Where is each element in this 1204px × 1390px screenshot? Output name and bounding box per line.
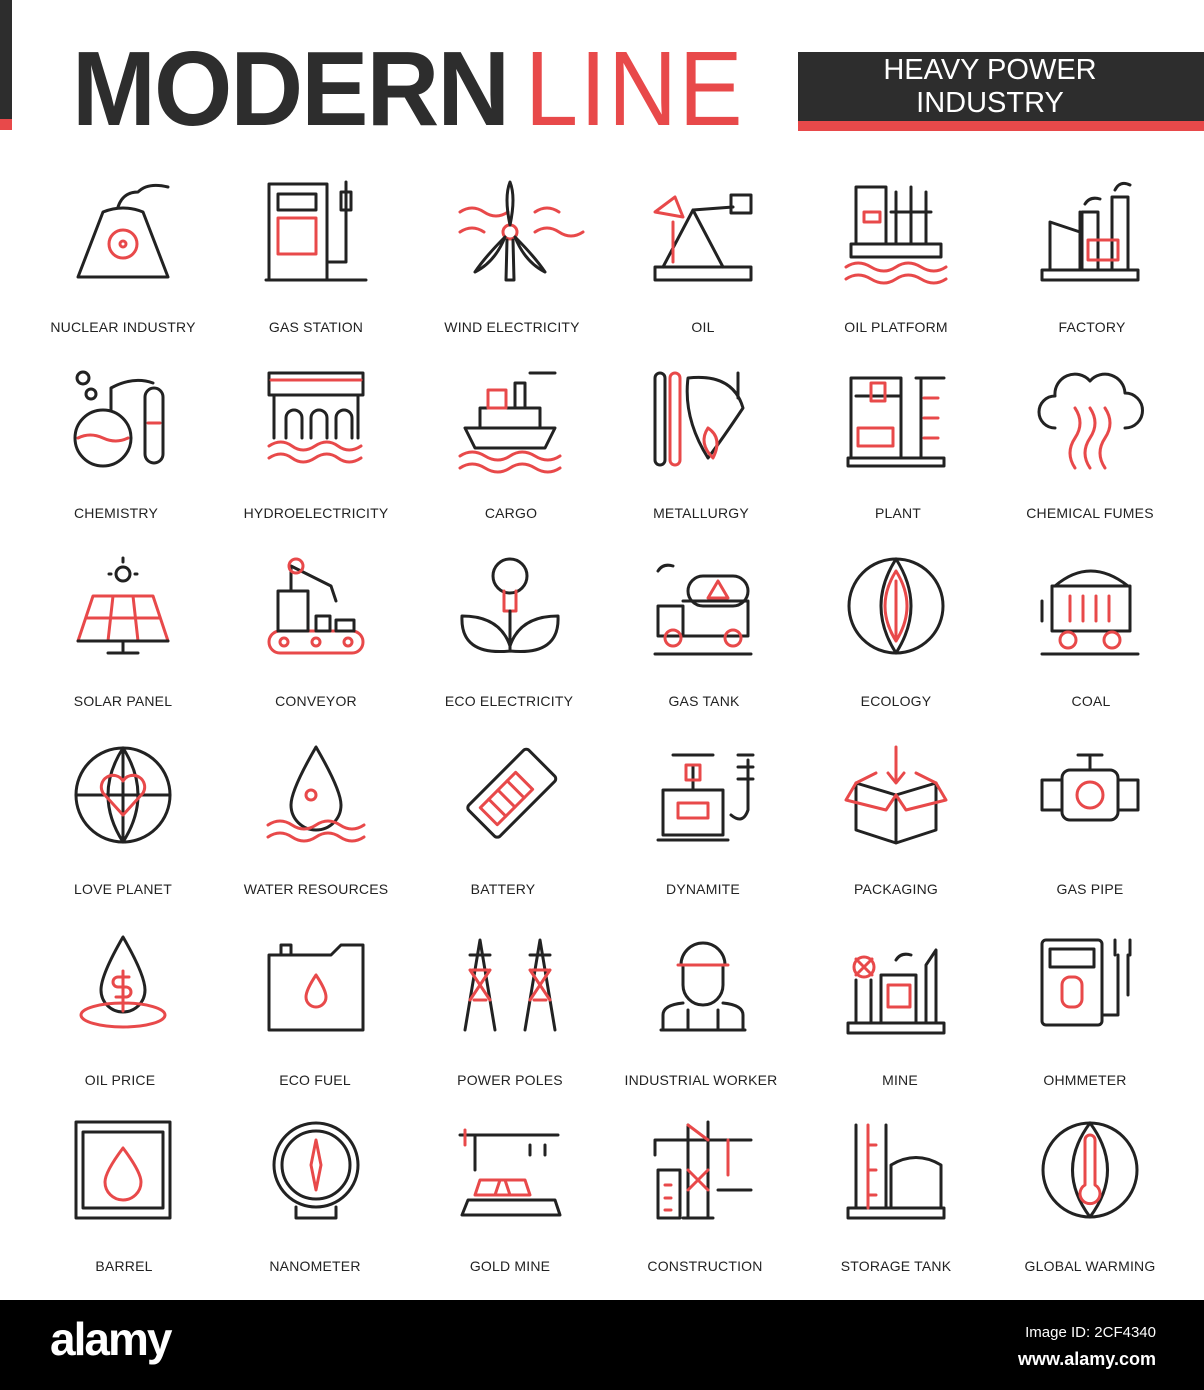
text: FACTORY	[1058, 319, 1126, 335]
text: OIL PRICE	[85, 1072, 155, 1088]
icon: oil platform	[846, 187, 946, 283]
icon: gas tank	[655, 565, 751, 654]
icon: storage tank	[848, 1125, 944, 1218]
text: CONVEYOR	[275, 693, 357, 709]
footer info: www.alamy.com	[1018, 1349, 1156, 1369]
text: ECO ELECTRICITY	[445, 693, 573, 709]
text: PLANT	[875, 505, 921, 521]
icon: dynamite	[658, 755, 753, 840]
footer info: Image ID: 2CF4340	[1025, 1324, 1156, 1341]
footer info	[1018, 1324, 1156, 1369]
text: BATTERY	[471, 881, 535, 897]
text: CONSTRUCTION	[647, 1258, 763, 1274]
text: OIL	[691, 319, 715, 335]
text: DYNAMITE	[666, 881, 740, 897]
text: POWER POLES	[457, 1072, 563, 1088]
text: CARGO	[485, 505, 537, 521]
text: SOLAR PANEL	[74, 693, 172, 709]
icon: packaging	[846, 747, 946, 843]
icon: construction	[655, 1122, 751, 1218]
icon: factory	[1042, 183, 1138, 280]
header left bar	[0, 0, 12, 130]
text: WATER RESOURCES	[244, 881, 388, 897]
icon: gold mine	[460, 1130, 560, 1215]
text: GAS PIPE	[1057, 881, 1123, 897]
subtitle box	[798, 52, 1204, 131]
icon: eco fuel	[269, 945, 363, 1030]
icon: barrel	[76, 1122, 170, 1218]
text: GAS STATION	[269, 319, 363, 335]
text: HYDROELECTRICITY	[244, 505, 388, 521]
title: LINE	[525, 30, 744, 148]
icon: wind	[460, 182, 583, 280]
icon: metallurgy	[655, 373, 743, 465]
icon: ohmmeter	[1042, 940, 1130, 1025]
title: MODERN	[72, 30, 508, 148]
icon: cargo	[460, 373, 560, 472]
title	[72, 30, 744, 148]
icon: ecology	[849, 559, 943, 653]
labels: NUCLEAR INDUSTRY	[50, 319, 196, 335]
text: BARREL	[95, 1258, 153, 1274]
icon: plant	[848, 378, 944, 466]
text: WIND ELECTRICITY	[444, 319, 580, 335]
icon: oil price	[81, 937, 165, 1027]
icon: oil pump	[655, 195, 751, 280]
icon: conveyor	[269, 559, 363, 653]
subtitle box: HEAVY POWER	[883, 54, 1097, 86]
icon: water	[268, 747, 364, 841]
icon: nuclear	[78, 185, 168, 277]
icon: chemistry	[75, 372, 163, 466]
footer logo: alamy	[50, 1313, 170, 1365]
text: MINE	[882, 1072, 918, 1088]
text: CHEMICAL FUMES	[1026, 505, 1154, 521]
icon: coal	[1042, 571, 1138, 654]
icon: power poles	[465, 940, 555, 1030]
text: LOVE PLANET	[74, 881, 172, 897]
text: METALLURGY	[653, 505, 749, 521]
text: ECOLOGY	[861, 693, 931, 709]
text: GLOBAL WARMING	[1025, 1258, 1155, 1274]
icon: global warming	[1043, 1123, 1137, 1217]
icon: hydro	[269, 373, 363, 462]
text: INDUSTRIAL WORKER	[624, 1072, 778, 1088]
text: PACKAGING	[854, 881, 938, 897]
icon: love planet	[76, 748, 170, 842]
text: OHMMETER	[1043, 1072, 1127, 1088]
icon: gas station	[266, 182, 366, 280]
text: ECO FUEL	[279, 1072, 351, 1088]
icon: mine	[848, 950, 944, 1033]
icon: gas pipe	[1042, 755, 1138, 820]
footer bar	[0, 1300, 1204, 1390]
text: STORAGE TANK	[841, 1258, 951, 1274]
text: OIL PLATFORM	[844, 319, 948, 335]
icon: solar	[78, 558, 168, 653]
subtitle box: INDUSTRY	[916, 87, 1064, 119]
text: GAS TANK	[668, 693, 740, 709]
text: CHEMISTRY	[74, 505, 158, 521]
text: NANOMETER	[269, 1258, 361, 1274]
icon: eco electricity	[462, 559, 558, 652]
icon: worker	[661, 943, 745, 1030]
icon: battery	[466, 748, 557, 839]
text: COAL	[1072, 693, 1110, 709]
icon: fumes	[1039, 374, 1142, 468]
text: GOLD MINE	[470, 1258, 550, 1274]
icon: nanometer	[274, 1123, 358, 1218]
